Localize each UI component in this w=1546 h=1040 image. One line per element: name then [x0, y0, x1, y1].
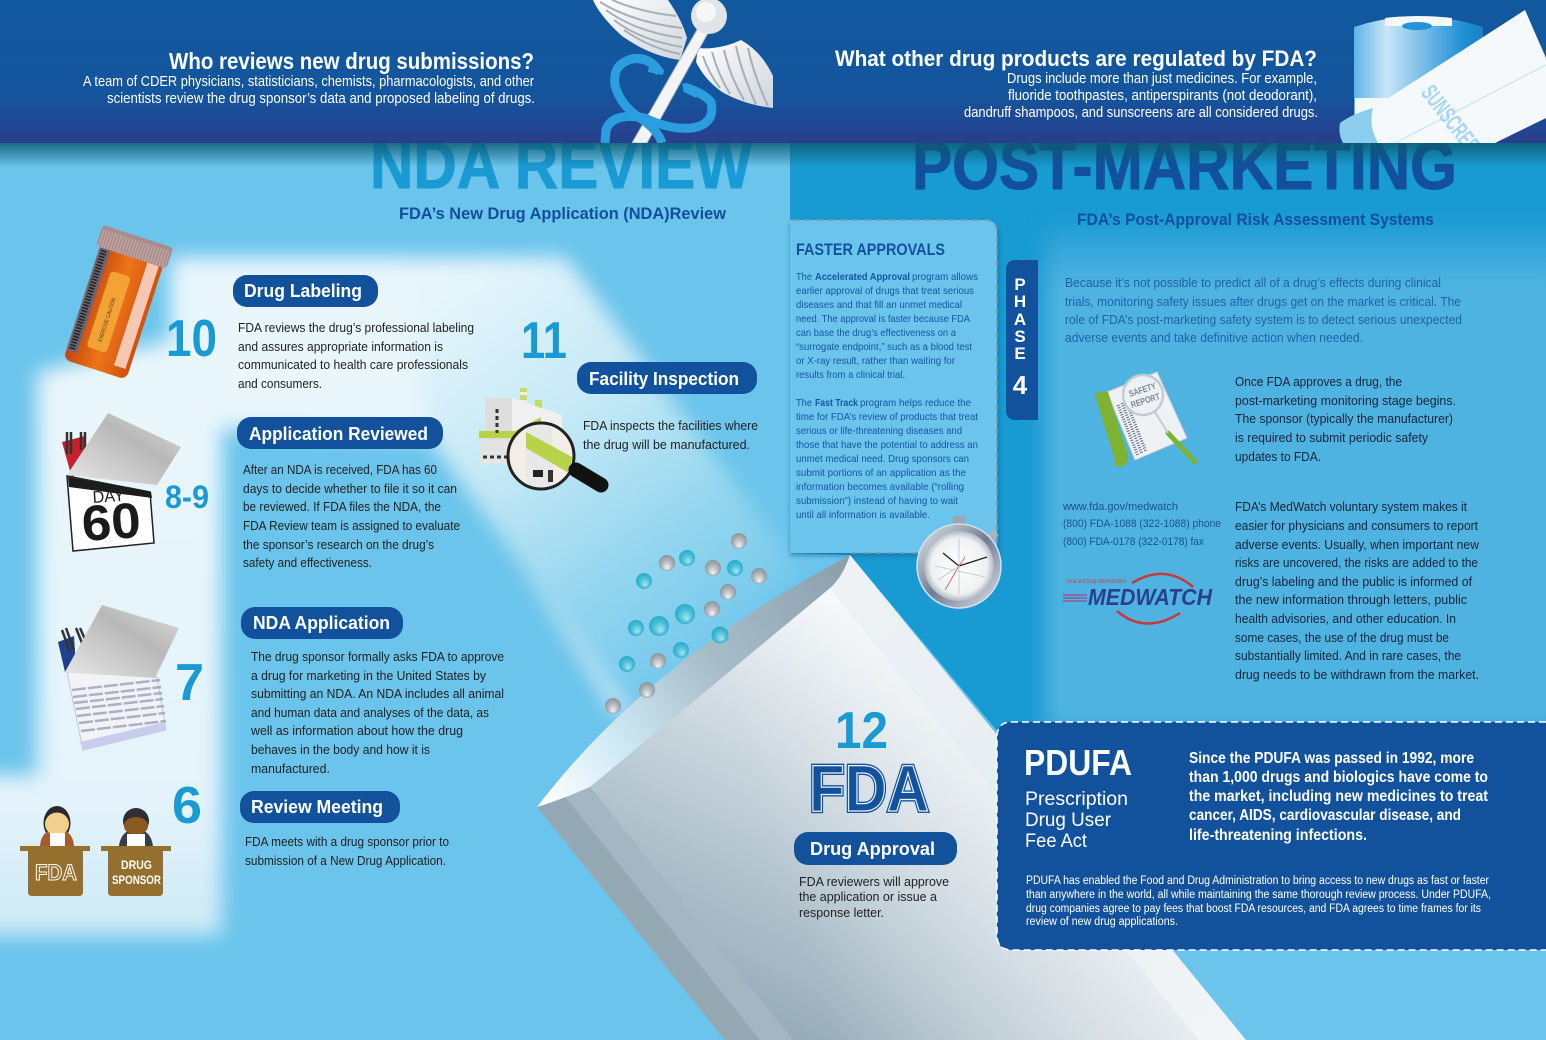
PDUFA detail text: than anywhere in the world, all while maintaining the same thorough review process. Under PDUFA, — [1026, 889, 1491, 901]
glow path: NDA review steps — [0, 257, 800, 935]
text: accelerated approval: earlier approval of drugs that treat serious — [796, 285, 974, 297]
step 6: icon drug sponsor: SPONSOR — [112, 873, 161, 887]
step 7: text: The drug sponsor formally asks FDA to approve — [251, 650, 504, 664]
PDUFA expansion — [1025, 789, 1128, 852]
text: MedWatch voluntary system: the new information through letters, public — [1235, 593, 1467, 607]
text: MedWatch voluntary system — [1235, 500, 1480, 682]
title: NDA review: NDA REVIEW — [370, 127, 753, 203]
PDUFA expansion: Drug User — [1025, 810, 1112, 831]
step 6: icon FDA representative: FDA — [35, 860, 77, 885]
phase 4 tab: S — [1014, 327, 1026, 346]
MedWatch logo: MEDWATCH — [1088, 584, 1212, 610]
post-marketing intro text: Because it’s not possible to predict all of a drug’s effects during clinical — [1065, 276, 1441, 290]
step 7: text: manufactured. — [251, 762, 330, 776]
step 6: text — [245, 835, 449, 868]
step 12: text: response letter. — [799, 905, 884, 920]
text: fast track: program helps reduce the — [860, 397, 971, 409]
step 12: number: 12 — [835, 702, 888, 760]
header right: other products: Drugs include more than just medicines. For example, — [1007, 71, 1317, 87]
PDUFA detail text: drug companies agree to pay fees that boost FDA resources, and FDA agrees to time frames for its — [1026, 903, 1481, 915]
header left: who reviews: A team of CDER physicians, statisticians, chemists, pharmacologists, and other — [83, 74, 534, 90]
icon: safety report: REPORT — [1130, 391, 1162, 410]
icon: safety report: SAFETY — [1128, 381, 1157, 399]
step 8-9: icon calendar: DAY — [92, 486, 125, 507]
step 7: text: behaves in the body and how it is — [251, 743, 430, 757]
text: MedWatch voluntary system: health advisories, and other education. In — [1235, 612, 1456, 626]
MedWatch logo: Food and Drug Administration — [1066, 579, 1126, 585]
text: sponsor safety updates: post-marketing monitoring stage begins. — [1235, 394, 1456, 408]
step 11: icon factory and magnifier — [479, 388, 601, 489]
phase 4 tab: A — [1014, 310, 1026, 329]
text: MedWatch voluntary system: adverse events. Usually, when important new — [1235, 538, 1480, 552]
panel: PDUFA — [997, 722, 1546, 950]
step 7: text: well as information about how the drug — [250, 724, 463, 738]
PDUFA key statement: cancer, AIDS, cardiovascular disease, and — [1189, 807, 1461, 824]
step 12: heading pill — [794, 832, 957, 865]
MedWatch logo — [1063, 574, 1212, 624]
step 11: text — [583, 419, 758, 452]
step 6: heading pill: Review Meeting — [251, 797, 383, 817]
text: accelerated approval: diseases and that fill an unmet medical — [796, 299, 962, 311]
step 8-9: text: FDA Review team is assigned to evaluate — [243, 519, 460, 533]
step 10: icon pill bottle — [60, 225, 173, 381]
step 7: text: a drug for marketing in the United States by — [251, 669, 487, 683]
text: fast track: those that have the potential to address an — [796, 439, 978, 451]
post-marketing intro text: adverse events and take definitive action when needed. — [1065, 331, 1363, 345]
text: sponsor safety updates: The sponsor (typically the manufacturer) — [1235, 412, 1453, 426]
step 8-9: text: the sponsor’s research on the drug’s — [243, 538, 434, 552]
subtitle: NDA review: FDA’s New Drug Application (NDA)Review — [399, 205, 726, 223]
droplets — [605, 533, 767, 714]
step 7: text: submitting an NDA. An NDA includes all animal — [251, 687, 504, 701]
text: accelerated approval: Accelerated Approval — [815, 271, 910, 283]
step 10: text: FDA reviews the drug’s professional labeling — [238, 321, 474, 335]
step 6: text: FDA meets with a drug sponsor prior to — [245, 835, 449, 849]
step 7: heading pill: NDA Application — [253, 613, 390, 633]
text: accelerated approval: results from a clinical trial. — [796, 369, 905, 381]
panel: faster approvals — [790, 220, 999, 556]
MedWatch contact details: (800) FDA-1088 (322-1088) phone — [1063, 518, 1221, 530]
text: fast track: information becomes available (“rolling — [796, 481, 964, 493]
step 6: text: submission of a New Drug Application. — [245, 854, 446, 868]
step 7: number: 7 — [175, 654, 204, 712]
text: MedWatch voluntary system: some cases, the use of the drug must be — [1235, 631, 1449, 645]
phase 4 tab: P — [1014, 275, 1026, 294]
PDUFA detail text: review of new drug applications. — [1026, 916, 1178, 928]
PDUFA key statement — [1189, 750, 1489, 844]
icon: safety report — [1095, 372, 1195, 467]
step 6: number: 6 — [172, 777, 202, 835]
text: accelerated approval — [796, 271, 978, 381]
PDUFA expansion: Fee Act — [1025, 831, 1088, 852]
text: MedWatch voluntary system: drug’s labeling and the public is informed of — [1235, 575, 1473, 589]
text: accelerated approval: or X-ray result, rather than waiting for — [796, 355, 955, 367]
text: MedWatch voluntary system: FDA’s MedWatch voluntary system makes it — [1235, 500, 1468, 514]
step 6: icon FDA representative — [20, 806, 90, 896]
phase 4 tab: H — [1014, 292, 1026, 311]
text: accelerated approval: The — [796, 271, 812, 283]
text: accelerated approval: “surrogate endpoint,” such as a blood test — [796, 341, 972, 353]
PDUFA key statement: the market, including new medicines to treat — [1189, 788, 1489, 805]
header right: other products: fluoride toothpastes, antiperspirants (not deodorant), — [1008, 88, 1317, 104]
text: fast track: unmet medical need. Drug sponsors can — [796, 453, 969, 465]
header right: other products — [835, 46, 1318, 121]
PDUFA detail text: PDUFA has enabled the Food and Drug Administration to bring access to new drugs as fast or faster — [1026, 875, 1489, 887]
phase 4 tab — [1006, 260, 1038, 420]
MedWatch contact details: www.fda.gov/medwatch — [1062, 501, 1178, 513]
icon: sunscreen bottle and tube: SUNSCREEN — [1415, 80, 1491, 166]
step 7: heading pill — [241, 607, 403, 639]
step 6: icon drug sponsor: DRUG — [121, 858, 152, 872]
header right: other products: dandruff shampoos, and sunscreens are all considered drugs. — [964, 105, 1318, 121]
text: fast track: The — [796, 397, 812, 409]
header shadow — [0, 143, 1546, 167]
step 10: text: and assures appropriate information is — [238, 340, 443, 354]
icon: stopwatch — [917, 516, 1001, 608]
post-marketing intro text — [1065, 276, 1462, 345]
header left: who reviews — [83, 48, 535, 107]
text: fast track: time for FDA’s review of products that treat — [796, 411, 978, 423]
step 6: icon drug sponsor — [101, 808, 171, 896]
step 12: text — [799, 874, 949, 920]
header left: who reviews: Who reviews new drug submissions? — [169, 48, 534, 74]
step 7: icon form — [58, 605, 179, 750]
subtitle: post-approval: FDA’s Post-Approval Risk Assessment Systems — [1077, 211, 1434, 229]
step 11: heading pill: Facility Inspection — [589, 369, 739, 389]
MedWatch contact details — [1062, 501, 1221, 548]
text: sponsor safety updates: updates to FDA. — [1235, 450, 1321, 464]
step 8-9: heading pill — [237, 417, 443, 449]
post-marketing intro text: role of FDA’s post-marketing safety system is to detect serious unexpected — [1065, 313, 1462, 327]
text: fast track: submit portions of an application as the — [796, 467, 966, 479]
step 8-9: icon calendar — [62, 413, 181, 552]
heading: faster approvals: FASTER APPROVALS — [796, 241, 945, 259]
text: fast track: submission”) instead of having to wait — [796, 495, 958, 507]
panel: post-marketing background — [790, 143, 1546, 731]
step 7: text — [250, 650, 504, 776]
icon: sunscreen bottle and tube — [1339, 10, 1546, 143]
step 11: number: 11 — [521, 312, 567, 370]
PDUFA key statement: life-threatening infections. — [1189, 827, 1367, 844]
post-marketing intro text: trials, monitoring safety issues after drugs get on the market is critical. The — [1065, 295, 1461, 309]
text: accelerated approval: program allows — [912, 271, 978, 283]
step 8-9: icon calendar: 60 — [80, 492, 143, 552]
text: fast track — [796, 397, 978, 521]
PDUFA heading: PDUFA — [1024, 742, 1132, 783]
step 10: text: communicated to health care professionals — [238, 358, 468, 372]
header right: other products: What other drug products are regulated by FDA? — [835, 46, 1317, 71]
step 12: text: the application or issue a — [799, 889, 938, 904]
step 10: text — [238, 321, 474, 391]
phase 4 tab: 4 — [1013, 370, 1028, 400]
step 10: icon pill bottle: EXERCISE CAUTION — [98, 297, 118, 343]
title: post-marketing: POST-MARKETING — [912, 128, 1457, 204]
PDUFA expansion: Prescription — [1025, 789, 1128, 810]
step 8-9: number: 8-9 — [165, 479, 209, 515]
step 12: FDA logo: FDA — [809, 751, 929, 825]
step 12: text: FDA reviewers will approve — [799, 874, 949, 889]
phase 4 tab: E — [1014, 344, 1026, 363]
step 11: heading pill — [577, 362, 757, 394]
step 6: heading pill — [240, 791, 400, 823]
header left: who reviews: scientists review the drug sponsor’s data and proposed labeling of drugs. — [107, 91, 535, 107]
text: accelerated approval: need. The approval is faster because FDA — [796, 313, 970, 325]
step 8-9: text: be reviewed. If FDA files the NDA, the — [243, 500, 441, 514]
PDUFA key statement: Since the PDUFA was passed in 1992, more — [1189, 750, 1474, 767]
step 10: heading pill: Drug Labeling — [244, 281, 362, 301]
text: fast track: serious or life-threatening diseases and — [796, 425, 962, 437]
step 11: text: FDA inspects the facilities where — [583, 419, 758, 433]
text: MedWatch voluntary system: risks are uncovered, the risks are added to the — [1235, 556, 1478, 570]
step 11: text: the drug will be manufactured. — [583, 438, 750, 452]
text: sponsor safety updates — [1235, 375, 1456, 464]
step 10: heading pill — [233, 275, 378, 307]
text: fast track: Fast Track — [815, 397, 858, 409]
PDUFA detail text — [1026, 875, 1491, 928]
drug tube: funnel — [537, 555, 1246, 1040]
text: fast track: until all information is available. — [796, 509, 930, 521]
text: sponsor safety updates: is required to submit periodic safety — [1235, 431, 1429, 445]
step 8-9: heading pill: Application Reviewed — [249, 424, 428, 444]
PDUFA key statement: than 1,000 drugs and biologics have come to — [1189, 769, 1488, 786]
header band — [0, 0, 1546, 143]
step 8-9: text: After an NDA is received, FDA has 60 — [243, 463, 437, 477]
step 10: text: and consumers. — [238, 377, 322, 391]
MedWatch contact details: (800) FDA-0178 (322-0178) fax — [1063, 536, 1204, 548]
step 8-9: text: days to decide whether to file it so it can — [243, 482, 457, 496]
step 8-9: text: safety and effectiveness. — [243, 556, 372, 570]
step 10: number: 10 — [166, 310, 217, 368]
step 7: text: and human data and analyses of the data, as — [251, 706, 489, 720]
text: MedWatch voluntary system: easier for physicians and consumers to report — [1235, 519, 1478, 533]
step 12: FDA logo: FDA — [809, 751, 929, 825]
text: sponsor safety updates: Once FDA approves a drug, the — [1235, 375, 1402, 389]
text: accelerated approval: can base the drug’s effectiveness on a — [796, 327, 956, 339]
icon: caduceus — [593, 0, 773, 143]
text: MedWatch voluntary system: drug needs to be withdrawn from the market. — [1235, 668, 1479, 682]
step 12: heading pill: Drug Approval — [810, 839, 935, 859]
text: MedWatch voluntary system: substantially limited. And in rare cases, the — [1235, 649, 1461, 663]
step 8-9: text — [243, 463, 460, 570]
